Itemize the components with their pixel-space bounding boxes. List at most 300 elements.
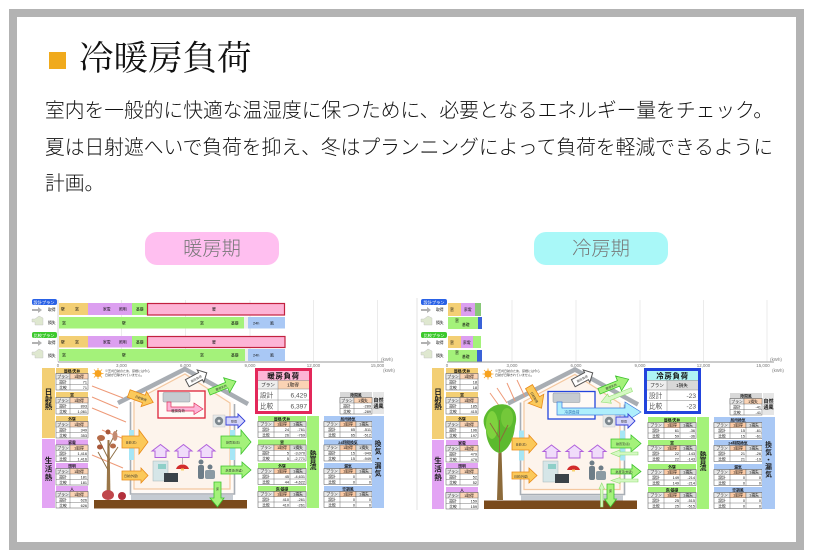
table: floor heat flow: -515: [687, 504, 695, 508]
side label: heat flow: 貫: [700, 458, 707, 466]
table: roof: 71: [83, 386, 87, 390]
table: wall heat flow: 149: [673, 482, 679, 486]
table: window: 比較: [449, 409, 457, 414]
side label: infiltration: [763, 393, 774, 415]
table: roof heat flow: 1損失: [683, 423, 693, 428]
bars: comparison gain: 窓: [75, 340, 79, 344]
table: outer wall: 外壁: [68, 416, 76, 422]
table: wall heat flow: 設計: [652, 475, 660, 480]
bars: design gain: 基礎: [136, 306, 144, 312]
table: air intake: 空調風: [342, 486, 354, 492]
axis labels: 6,000: [570, 363, 582, 368]
table: infiltration: 比較: [733, 410, 741, 415]
arrow: solar gain roof: [521, 382, 549, 413]
table: wall heat flow: 外壁: [668, 464, 676, 470]
arrows: heat flow wall: [611, 464, 641, 484]
table: local ventilation: 15: [741, 429, 745, 433]
axis labels: (kWh): [772, 368, 784, 373]
side label: ventilation: 気: [375, 468, 382, 478]
design plan tag: [421, 299, 447, 306]
table: outer wall: 197: [471, 434, 477, 438]
table: roof heat flow: 59: [675, 434, 679, 438]
table: people: 比較: [59, 503, 67, 508]
table: lighting: [446, 463, 478, 485]
panel: cooling load chart: [417, 298, 784, 510]
table: wall heat flow: 比較: [652, 480, 660, 486]
house illustration: summer: [484, 367, 641, 509]
table: local ventilation: 65: [351, 434, 355, 438]
table: roof heat flow: 1取得: [277, 422, 287, 427]
table: roof heat flow: [258, 416, 306, 438]
energy balance bar chart: cooling: [417, 298, 784, 510]
table: roof heat flow: -36: [690, 429, 695, 433]
bars: design gain: 窓: [75, 306, 79, 312]
table: roof: プラン: [57, 374, 69, 379]
table: floor heat flow: 比較: [262, 502, 270, 508]
table: lighting: 比較: [59, 480, 67, 485]
arrow: roof heat loss: [206, 374, 239, 400]
table: infiltration: 設計: [343, 403, 351, 408]
table: outer wall: 353: [81, 434, 87, 438]
bars: design gain: 家電: [103, 306, 111, 312]
table: local ventilation: -61: [756, 429, 761, 433]
table: people: 設計: [59, 497, 67, 502]
table: window: 比較: [59, 409, 67, 414]
panel: cooling load box in house: [548, 392, 641, 422]
table: roof: 18: [473, 380, 477, 384]
table: floor heat flow: 25: [675, 504, 679, 508]
table: air intake: 0: [353, 504, 355, 508]
table: roof: 比較: [59, 385, 67, 390]
table: appliances: 比較: [59, 456, 67, 461]
table: local ventilation: 比較: [718, 434, 726, 438]
table: air intake: 0: [369, 498, 371, 502]
arrow: solar gain wall: 日射(外壁): [124, 473, 138, 478]
bars: comparison loss: 24h: [253, 354, 259, 358]
arrow: heat loss floor: 床: [216, 486, 219, 491]
bars: design loss: 24h: [253, 322, 259, 326]
table: wall heat flow: 1取得: [667, 470, 677, 475]
table: outer wall: [446, 416, 478, 438]
bars: comparison gain: 基礎: [136, 340, 144, 344]
table: roof heat flow: 61: [675, 429, 679, 433]
table: 24h ventilation: -949: [363, 457, 371, 461]
table: roof heat flow: プラン: [260, 422, 272, 427]
table: air intake: 比較: [328, 502, 336, 508]
table: local ventilation: 局所換気: [730, 418, 746, 422]
table: local ventilation: 局所換気: [340, 416, 356, 422]
heating period label: 暖房期: [183, 239, 241, 260]
table: local ventilation: 15: [741, 434, 745, 438]
table: lighting: プラン: [57, 469, 69, 474]
arrow: roof ventilation: [570, 367, 596, 389]
table: local ventilation: [324, 416, 372, 438]
table: air leakage: 1取得: [343, 469, 353, 474]
icon: fan: [603, 415, 615, 427]
table: appliances: 設計: [449, 451, 457, 456]
table: people: [446, 487, 478, 509]
table: people: プラン: [447, 493, 459, 498]
table: air intake: 1損失: [749, 493, 759, 498]
axis labels: (kWh): [770, 357, 782, 362]
table: 24h ventilation: プラン: [326, 445, 338, 450]
table: window: [56, 392, 88, 414]
bars: design gain: 家電: [464, 307, 472, 312]
table: roof heat flow: 屋根/天井: [274, 416, 290, 422]
table: floor heat flow: [258, 486, 306, 508]
bars: comparison gain: 家電: [103, 340, 111, 344]
arrow: heat loss window: [221, 430, 251, 454]
table: air intake: 設計: [328, 497, 336, 502]
table: wall heat flow: 1取得: [277, 469, 287, 474]
table: infiltration: [730, 393, 762, 415]
table: 24h ventilation: 15: [351, 452, 355, 456]
icon: orange square bullet: [49, 52, 66, 69]
table: window heat flow: 1取得: [277, 445, 287, 450]
table: 24h ventilation: 21: [741, 452, 745, 456]
comparison plan tag: 比較プラン: [34, 332, 54, 339]
side label: solar heat: 射: [434, 394, 442, 404]
table: outer wall: [56, 416, 88, 438]
table: window: 185: [471, 404, 477, 408]
side label: ventilation: [762, 417, 775, 509]
panel: heating load box in house: [158, 391, 205, 418]
table: roof: 1取得: [464, 374, 474, 379]
side label: internal heat: [432, 440, 444, 509]
table: lighting: 1取得: [464, 469, 474, 474]
table: air leakage: 設計: [328, 474, 336, 479]
table: local ventilation: 1損失: [749, 423, 759, 428]
table: window heat flow: 窓: [670, 440, 674, 446]
side label: ventilation: 換: [765, 440, 772, 449]
table: 24h ventilation: 1損失: [749, 446, 759, 451]
table: floor heat flow: -515: [687, 499, 695, 503]
table: local ventilation: -61: [756, 434, 761, 438]
table: local ventilation: -511: [364, 428, 371, 432]
panel: cooling load summary: -23: [686, 404, 696, 410]
arrow: heat loss window: 熱貫流(窓): [226, 440, 240, 444]
arrow: draft: [226, 414, 245, 428]
side label: heat flow: 熱: [310, 449, 317, 458]
table: floor heat flow: 1取得: [667, 493, 677, 498]
table: roof heat flow: -761: [297, 428, 305, 432]
table: wall heat flow: -4,622: [294, 480, 305, 484]
table: air leakage: 1損失: [359, 469, 369, 474]
side label: ventilation: 漏: [765, 462, 772, 471]
icon: fan: [213, 415, 225, 427]
comparison plan tag: [32, 332, 57, 339]
table: window: 窓: [70, 392, 74, 398]
table: wall heat flow: -4,631: [294, 475, 305, 479]
table: window heat flow: 設計: [652, 451, 660, 456]
table: outer wall: プラン: [447, 422, 459, 427]
table: outer wall: 196: [471, 428, 477, 432]
table: window: 1取得: [464, 398, 474, 403]
bars: design gain: [448, 303, 481, 316]
side label: internal heat: [42, 439, 55, 508]
table: people: 比較: [449, 504, 457, 509]
panel: cooling load summary: 1損失: [676, 382, 688, 389]
panel: heating load summary: 1取得: [287, 382, 299, 388]
table: window: 893: [81, 404, 87, 408]
axis labels: 15,000: [756, 363, 770, 368]
side label: ventilation: [372, 416, 384, 508]
table: appliances: 1,416: [77, 452, 87, 456]
table: 24h ventilation: 24時間換気: [338, 440, 358, 445]
bars: design gain: 壁: [61, 306, 65, 312]
table: 24h ventilation: 21: [741, 458, 745, 462]
arrow: solar gain window: [122, 430, 148, 454]
table: 24h ventilation: 24時間換気: [728, 440, 748, 446]
table: floor heat flow: 設計: [652, 498, 660, 503]
table: lighting: 比較: [449, 480, 457, 485]
table: floor heat flow: 1損失: [293, 492, 303, 497]
table: wall heat flow: 44: [285, 480, 289, 484]
table: window: 415: [471, 410, 477, 414]
table: roof heat flow: 24: [285, 428, 289, 432]
gain and loss row labels: [32, 307, 56, 358]
panel: cooling load box in house: 冷房負荷: [564, 410, 580, 414]
side label: ventilation: 気: [375, 446, 382, 456]
side label: ventilation: ・: [765, 457, 772, 464]
side label: heat flow: 流: [310, 462, 317, 471]
table: window heat flow: -3,070: [294, 452, 305, 456]
arrows: heat flow window: 熱貫流(窓): [616, 441, 630, 446]
side label: solar heat: [42, 368, 55, 438]
table: roof heat flow: プラン: [650, 423, 662, 428]
table: people: 626: [81, 498, 87, 502]
arrow: heat loss floor: [210, 482, 224, 507]
arrow: solar gain window: [512, 435, 537, 453]
gain and loss row labels: 取得: [436, 307, 444, 312]
table: air leakage: 1損失: [749, 470, 759, 475]
axis labels: [57, 357, 395, 373]
table: infiltration: 1損失: [358, 398, 368, 403]
table: roof heat flow: 26: [285, 434, 289, 438]
side label: ventilation: 気: [765, 448, 772, 456]
table: air leakage: 0: [353, 475, 355, 479]
arrows: roof heat flow: [596, 372, 634, 407]
table: 24h ventilation: 1損失: [359, 445, 369, 450]
table: floor heat flow: 比較: [652, 504, 660, 508]
table: local ventilation: 1取得: [343, 422, 353, 427]
arrow: solar gain roof: [126, 386, 156, 410]
table: window: 1取得: [74, 398, 84, 403]
table: wall heat flow: 設計: [262, 474, 270, 479]
side label: solar heat: 日: [45, 388, 52, 396]
side label: infiltration: 通風: [373, 403, 384, 410]
side label: heat flow: [307, 416, 319, 508]
table: infiltration: -289: [363, 404, 371, 408]
table: air intake: [324, 486, 372, 508]
table: window heat flow: 比較: [652, 456, 660, 462]
table: roof: 71: [83, 380, 87, 384]
table: floor heat flow: 設計: [262, 497, 270, 502]
table: air intake: 0: [369, 504, 371, 508]
arrow: solar gain wall: [122, 468, 148, 483]
panel: heating load summary: 6,429: [290, 392, 307, 399]
table: wall heat flow: 外壁: [278, 464, 286, 468]
side label: ventilation: ・: [375, 456, 381, 463]
table: air leakage: 0: [743, 476, 745, 480]
table: air intake: プラン: [326, 492, 338, 497]
axis labels: 0: [57, 363, 60, 368]
table: 24h ventilation: 設計: [328, 450, 336, 456]
side label: heat flow: 熱: [700, 450, 707, 459]
table: floor heat flow: プラン: [650, 493, 662, 498]
table: wall heat flow: プラン: [650, 470, 662, 475]
table: air leakage: 0: [759, 482, 761, 486]
bars: comparison loss: 壁: [122, 352, 126, 358]
gain and loss row labels: 取得: [48, 307, 56, 312]
table: infiltration: -41: [756, 411, 761, 415]
design plan tag: 設計プラン: [424, 299, 444, 306]
design plan tag: [32, 299, 57, 306]
bars: design loss: 基礎: [231, 320, 239, 326]
bars: comparison gain: [448, 336, 481, 348]
table: roof: 屋根/天井: [454, 368, 470, 374]
table: infiltration: 隙間風: [350, 392, 362, 398]
table: wall heat flow: [258, 463, 306, 484]
side label: solar heat: 日: [434, 388, 442, 396]
arrows: heat flow window: [611, 435, 641, 457]
table: floor heat flow: 1損失: [683, 493, 693, 498]
arrows: heat flow wall: 熱貫流(外壁): [616, 469, 632, 474]
bars: comparison loss: 窓: [200, 352, 204, 358]
gain and loss row labels: 損失: [436, 320, 444, 325]
table: air intake: [714, 487, 762, 508]
intro text block: 計画。: [45, 173, 104, 195]
table: appliances: プラン: [447, 446, 459, 451]
table: air leakage: 漏気: [344, 464, 352, 468]
table: window: プラン: [447, 398, 459, 403]
table: air leakage: 漏気: [734, 464, 742, 470]
arrow: roof heat loss: 屋根天井: [215, 383, 228, 392]
bars: comparison gain: 窓: [450, 340, 454, 345]
table: air leakage: プラン: [716, 470, 728, 475]
table: air intake: 0: [759, 499, 761, 503]
panel: cooling load summary: 設計: [649, 391, 663, 400]
table: appliances: 1取得: [464, 446, 474, 451]
bars: design loss: 壁: [122, 320, 126, 326]
axis labels: 9,000: [634, 363, 646, 368]
table: roof: 屋根/天井: [64, 368, 80, 374]
table: lighting: 52: [473, 475, 477, 479]
table: outer wall: 設計: [59, 427, 67, 432]
design plan tag: 設計プラン: [34, 299, 54, 306]
table: lighting: 52: [473, 481, 477, 485]
bars: design loss: [59, 317, 285, 328]
table: window: 設計: [59, 403, 67, 408]
table: roof heat flow: 1取得: [667, 423, 677, 428]
table: 24h ventilation: 比較: [328, 456, 336, 461]
table: outer wall: 1取得: [74, 422, 84, 427]
table: window heat flow: プラン: [650, 446, 662, 451]
table: wall heat flow: -214: [687, 476, 695, 480]
bars: design gain: 暖: [212, 306, 216, 312]
table: local ventilation: 設計: [718, 428, 726, 433]
intro text block: 室内を一般的に快適な温湿度に保つために、必要となるエネルギー量をチェック。: [45, 100, 773, 122]
arrows: heat flow floor: 床: [609, 488, 612, 493]
table: window: プラン: [57, 398, 69, 403]
table: people: 1取得: [464, 493, 474, 498]
panel: cooling load summary: 比較: [649, 402, 663, 410]
arrow: solar gain roof: 日射取得: [134, 394, 148, 402]
bars: design loss: 窓: [455, 318, 459, 323]
table: window heat flow: 22: [675, 458, 679, 462]
table: air leakage: 0: [759, 476, 761, 480]
table: people: 626: [81, 504, 87, 508]
arrow: roof ventilation: 換気負荷: [190, 373, 203, 383]
table: air intake: 1損失: [359, 492, 369, 497]
table: infiltration: 設計: [733, 404, 741, 409]
table: roof: 設計: [449, 379, 457, 384]
axis labels: 15,000: [371, 363, 385, 368]
table: lighting: 1取得: [74, 469, 84, 474]
table: people: 159: [471, 505, 477, 509]
cooling period label: 冷房期: [572, 239, 630, 260]
table: air intake: 0: [743, 499, 745, 503]
panel: heating load chart: [32, 299, 395, 508]
side label: internal heat: 生: [45, 455, 53, 465]
table: air intake: 設計: [718, 498, 726, 503]
table: window heat flow: 窓: [280, 440, 284, 445]
bars: design loss: 窓: [62, 320, 66, 326]
icon: sun and note: [482, 368, 540, 380]
table: air leakage: 比較: [328, 480, 336, 484]
arrow: solar gain window: 日射(窓): [126, 440, 136, 444]
table: outer wall: プラン: [57, 422, 69, 427]
table: local ventilation: 1損失: [359, 422, 369, 427]
table: wall heat flow: 比較: [262, 480, 270, 484]
comparison plan tag: [421, 332, 447, 339]
table: wall heat flow: [648, 464, 696, 486]
arrow: draft: [616, 414, 635, 428]
side label: solar heat: 熱: [45, 401, 53, 411]
table: air leakage: [324, 463, 372, 484]
table: lighting: プラン: [447, 469, 459, 474]
table: outer wall: 外壁: [458, 416, 466, 422]
table: infiltration: -41: [756, 405, 761, 409]
bars: design gain: 照明: [119, 306, 127, 312]
bars: design loss: 基礎: [462, 322, 470, 327]
table: infiltration: 隙間風: [740, 394, 752, 398]
heating period label: [145, 232, 279, 265]
table: window heat flow: -2,771: [294, 457, 305, 461]
table: window heat flow: 比較: [262, 456, 270, 461]
table: floor heat flow: 410: [283, 498, 289, 502]
table: infiltration: プラン: [731, 399, 743, 404]
gain and loss row labels: [421, 307, 444, 358]
table: outer wall: 比較: [449, 433, 457, 438]
side label: solar heat: 熱: [434, 401, 442, 411]
icon: sun and note: [92, 368, 150, 379]
table: people: 159: [471, 499, 477, 503]
table: infiltration: プラン: [341, 398, 353, 403]
table: local ventilation: [714, 417, 762, 438]
table: 24h ventilation: 設計: [718, 451, 726, 456]
side label: heat flow: 貫: [310, 456, 317, 464]
table: window heat flow: 1損失: [293, 445, 303, 450]
table: 24h ventilation: [324, 440, 372, 461]
table: window heat flow: -143: [687, 452, 695, 456]
title: 冷暖房負荷: [79, 40, 252, 78]
icon: green tree: [484, 404, 516, 500]
side label: internal heat: 活: [434, 464, 442, 474]
table: air leakage: 0: [369, 475, 371, 479]
table: lighting: 照明: [68, 464, 76, 468]
table: roof heat flow: 比較: [652, 434, 660, 438]
